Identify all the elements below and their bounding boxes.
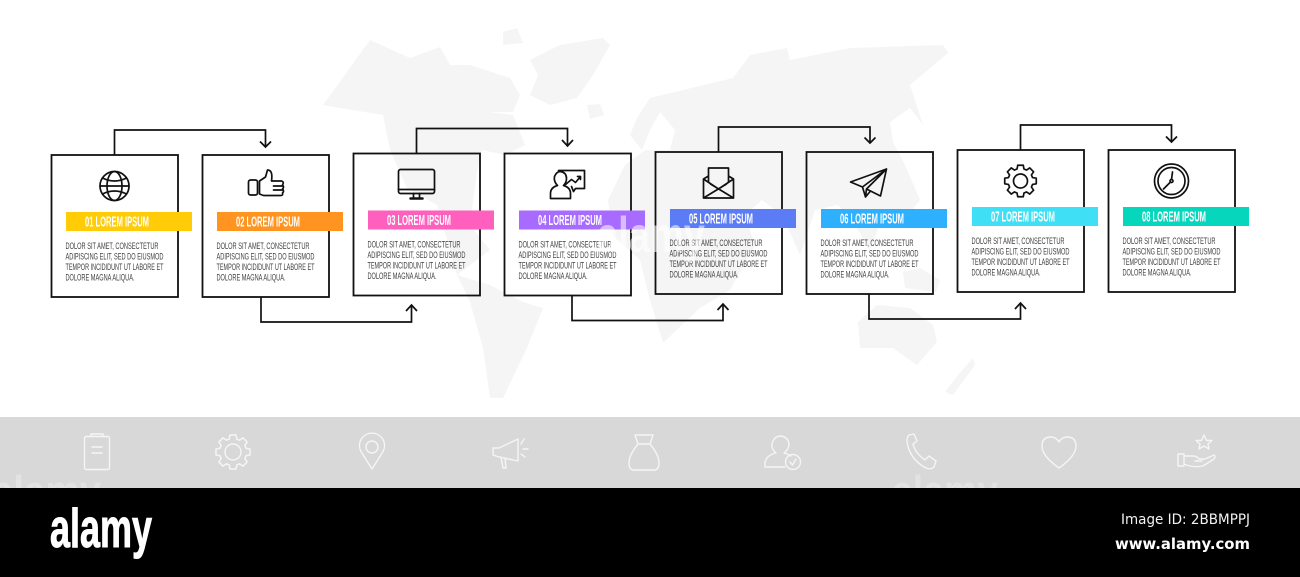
body text: DOLORE MAGNA ALIQUA.	[972, 268, 1040, 278]
icon: megaphone	[493, 439, 528, 468]
icon: gear	[1005, 165, 1036, 197]
body text	[216, 241, 315, 284]
body text: DOLOR SIT AMET, CONSECTETUR	[368, 240, 461, 250]
body text: DOLORE MAGNA ALIQUA.	[216, 272, 286, 284]
icon: user check	[765, 436, 800, 470]
world map background	[323, 28, 975, 398]
body text: TEMPOR INCIDIDUNT UT LABORE ET	[820, 259, 919, 270]
alamy logo: alamy	[50, 497, 152, 559]
body text: ADIPISCING ELIT, SED DO EIUSMOD	[66, 252, 164, 262]
body text: ADIPISCING ELIT, SED DO EIUSMOD	[518, 250, 617, 261]
title: 02 LOREM IPSUM	[236, 214, 300, 230]
icon: phone	[907, 434, 936, 469]
body text	[1122, 236, 1221, 278]
body text: DOLOR SIT AMET, CONSECTETUR	[66, 241, 159, 252]
body text: ADIPISCING ELIT, SED DO EIUSMOD	[216, 252, 315, 262]
body text	[66, 241, 164, 284]
watermark centre bottom: alamy	[892, 467, 998, 516]
icon: open envelope	[704, 168, 734, 198]
body text: DOLORE MAGNA ALIQUA.	[1122, 268, 1192, 278]
connector 5 to 6	[718, 127, 876, 152]
step 07 card	[958, 150, 1098, 292]
body text	[518, 240, 617, 282]
connector 4 to 5	[572, 295, 728, 320]
body text: DOLOR SIT AMET, CONSECTETUR	[1122, 236, 1216, 247]
body text: DOLOR SIT AMET, CONSECTETUR	[670, 238, 763, 249]
body text: ADIPISCING ELIT, SED DO EIUSMOD	[1122, 246, 1221, 258]
body text: DOLOR SIT AMET, CONSECTETUR	[518, 240, 612, 250]
icon: map pin	[360, 433, 384, 469]
title: 08 LOREM IPSUM	[1142, 208, 1206, 226]
black footer	[0, 488, 1300, 577]
website: www.alamy.com	[1115, 535, 1250, 553]
icon: gear outline	[216, 435, 250, 469]
title: 07 LOREM IPSUM	[991, 208, 1055, 226]
body text: TEMPOR INCIDIDUNT UT LABORE ET	[972, 257, 1070, 268]
body text: DOLORE MAGNA ALIQUA.	[820, 270, 890, 280]
connector 6 to 7	[869, 294, 1026, 319]
watermark centre: alamy	[597, 207, 705, 263]
body text	[820, 238, 919, 280]
step 04 card	[504, 154, 645, 296]
body text: TEMPOR INCIDIDUNT UT LABORE ET	[670, 259, 768, 270]
body text	[972, 236, 1070, 278]
step 05 card	[656, 152, 796, 294]
body text: DOLORE MAGNA ALIQUA.	[66, 272, 134, 284]
connector 1 to 2	[114, 130, 271, 155]
icon: thumbs up	[248, 170, 284, 196]
body text: TEMPOR INCIDIDUNT UT LABORE ET	[216, 262, 315, 273]
icon: monitor	[398, 170, 434, 198]
icon: hand with star	[1178, 435, 1215, 467]
body text: DOLORE MAGNA ALIQUA.	[518, 271, 588, 282]
body text: ADIPISCING ELIT, SED DO EIUSMOD	[972, 246, 1070, 258]
step 02 card	[202, 155, 343, 297]
connector 2 to 3	[261, 297, 417, 322]
body text: DOLOR SIT AMET, CONSECTETUR	[216, 241, 310, 252]
title: 06 LOREM IPSUM	[840, 210, 904, 228]
icon row	[84, 433, 1215, 470]
title: 01 LOREM IPSUM	[85, 214, 149, 230]
body text: DOLOR SIT AMET, CONSECTETUR	[972, 236, 1065, 247]
body text	[670, 238, 768, 280]
body text: ADIPISCING ELIT, SED DO EIUSMOD	[368, 250, 466, 261]
body text: DOLORE MAGNA ALIQUA.	[670, 270, 738, 280]
title: 05 LOREM IPSUM	[689, 210, 753, 228]
connector 7 to 8	[1020, 125, 1177, 150]
icon: clock	[1154, 164, 1188, 198]
step 06 card	[806, 152, 947, 294]
body text	[368, 240, 466, 282]
title: 03 LOREM IPSUM	[387, 212, 451, 229]
step 01 card	[52, 155, 192, 297]
body text: DOLORE MAGNA ALIQUA.	[368, 271, 436, 282]
connector 3 to 4	[416, 128, 573, 153]
icon: paper plane	[850, 169, 886, 197]
icon: presenter with chart	[550, 170, 584, 198]
bottom grey band	[0, 417, 1300, 488]
step 08 card	[1108, 150, 1249, 292]
body text: TEMPOR INCIDIDUNT UT LABORE ET	[66, 262, 164, 273]
icon: globe	[100, 172, 129, 200]
icon: heart	[1042, 437, 1076, 468]
image id: Image ID: 2BBMPPJ	[1121, 512, 1250, 528]
body text: TEMPOR INCIDIDUNT UT LABORE ET	[518, 260, 617, 272]
step 03 card	[354, 154, 494, 296]
icon: clipboard	[84, 434, 110, 470]
title: 04 LOREM IPSUM	[538, 212, 602, 229]
body text: DOLOR SIT AMET, CONSECTETUR	[820, 238, 914, 249]
icon: money bag	[629, 435, 659, 470]
body text: ADIPISCING ELIT, SED DO EIUSMOD	[670, 248, 768, 260]
body text: TEMPOR INCIDIDUNT UT LABORE ET	[368, 260, 466, 272]
body text: ADIPISCING ELIT, SED DO EIUSMOD	[820, 248, 919, 260]
body text: TEMPOR INCIDIDUNT UT LABORE ET	[1122, 257, 1221, 268]
